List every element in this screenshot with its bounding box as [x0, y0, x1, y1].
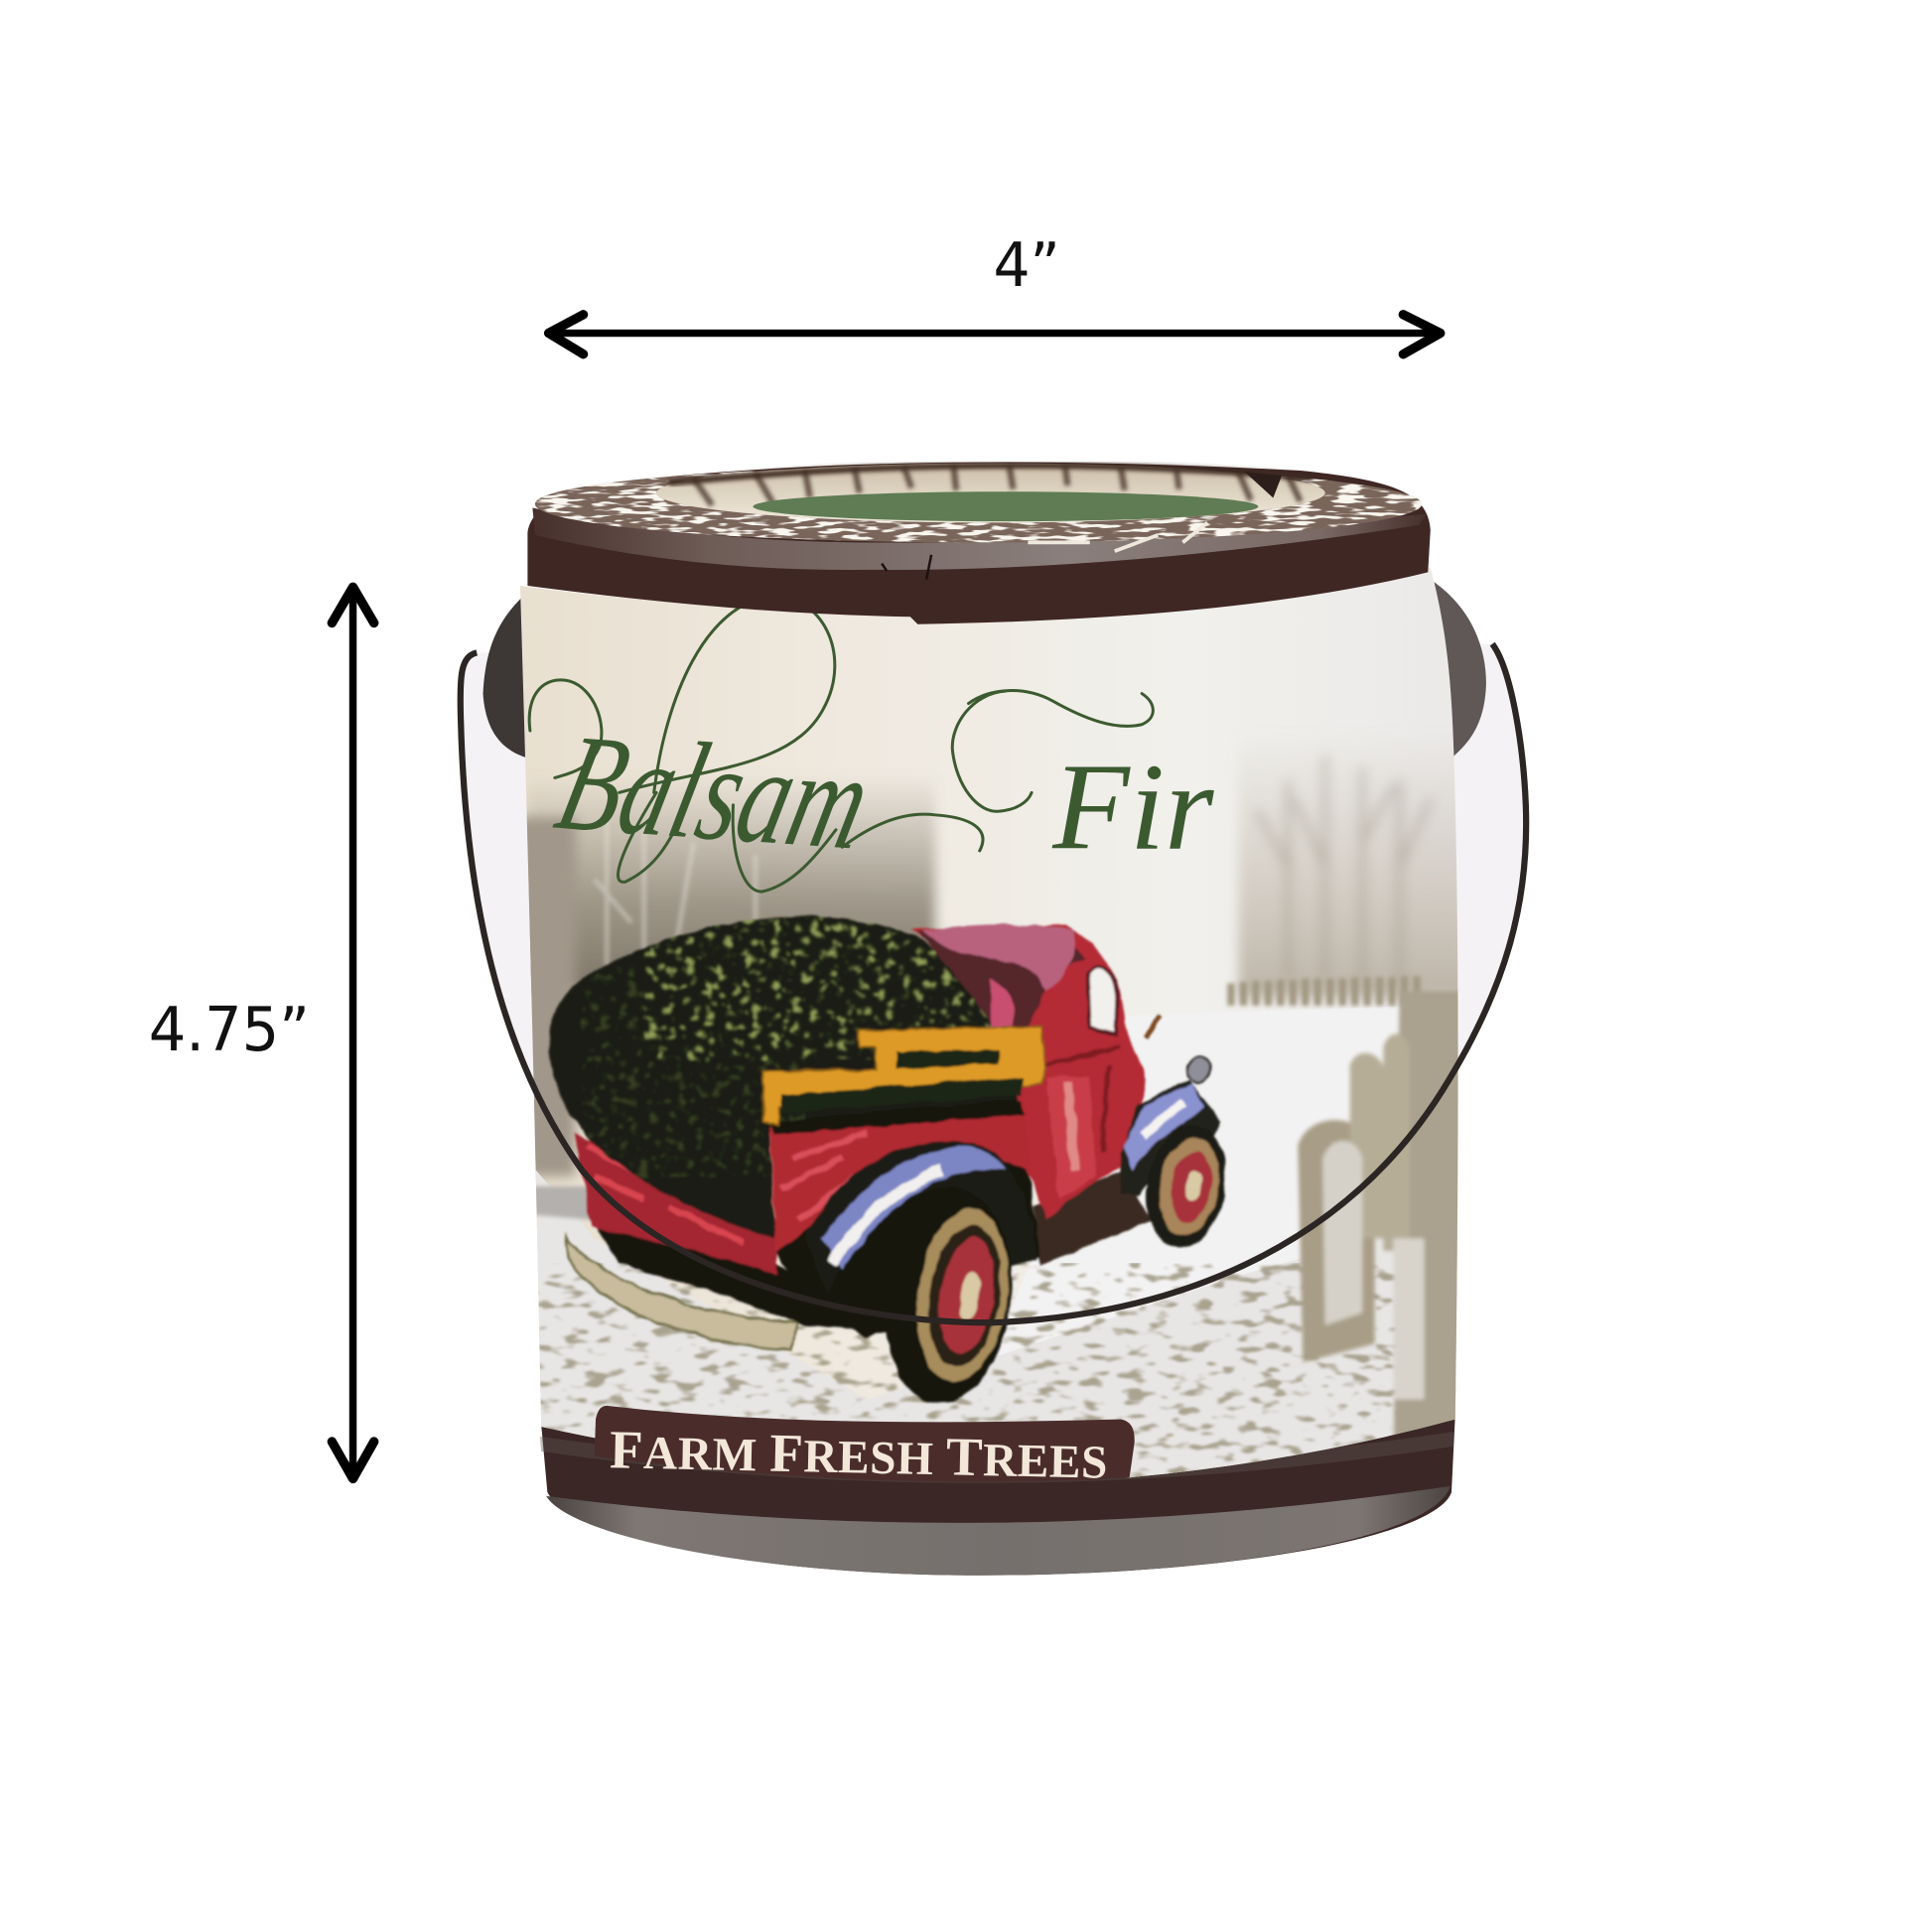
- galvanized base: [540, 1432, 1453, 1576]
- label: [507, 557, 1473, 1498]
- label base: [507, 557, 1473, 1498]
- truck cab: [910, 925, 1146, 1220]
- rim chips: [1028, 522, 1207, 551]
- cab door highlights: [1046, 1077, 1096, 1199]
- product name: Balsam Fir: [529, 597, 1214, 892]
- illustration: truck with tree: [532, 904, 1235, 1412]
- candle tin: [461, 463, 1526, 1576]
- arrow: width: [549, 315, 1441, 354]
- ground: [536, 1170, 1457, 1477]
- truck rear bed: [575, 1133, 777, 1276]
- wax surface: [753, 491, 1258, 521]
- headlamp: [1186, 1057, 1211, 1082]
- arrow: height: [332, 587, 374, 1478]
- distant fence: [1231, 976, 1417, 1006]
- rim cracks: [882, 555, 931, 580]
- fence posts: [1295, 989, 1458, 1436]
- foggy trees left: [514, 774, 935, 1176]
- rim: [527, 463, 1431, 624]
- icon: left handle ear: [483, 592, 527, 758]
- label banner: Farm Fresh Trees: FARM FRESH TREES: [609, 1419, 1108, 1490]
- tree load: [547, 913, 1020, 1239]
- tin base band: [541, 1416, 1455, 1576]
- side panel: [770, 1105, 1031, 1253]
- icon: right handle ear: [1435, 582, 1486, 758]
- product name: Balsam Fir: Fir: [1051, 738, 1214, 875]
- rail slits: [781, 1050, 1023, 1113]
- yellow rails: [762, 1027, 1045, 1125]
- front wheel: [1144, 1135, 1227, 1249]
- handle: [461, 644, 1526, 1322]
- dark bar: [770, 1100, 1026, 1135]
- handle backing haze: [461, 644, 1526, 1171]
- snowy road: [997, 1007, 1398, 1356]
- rim front band: [532, 507, 1427, 570]
- front fender: [805, 1141, 1037, 1295]
- mirror: [1146, 1016, 1162, 1037]
- width dimension label: 4”: [993, 230, 1060, 301]
- rim opening: [656, 464, 1325, 522]
- undercarriage: [596, 1227, 888, 1334]
- windshield: [1087, 967, 1117, 1035]
- rim dark chip: [1245, 472, 1282, 497]
- undercab chassis: [1035, 1171, 1152, 1266]
- rim collar: [527, 463, 1431, 624]
- infographic canvas: [151, 241, 1529, 1576]
- product name: Balsam Fir: Balsam: [544, 707, 884, 879]
- truck bumper: [566, 1237, 797, 1350]
- wheel well: [775, 1140, 1040, 1337]
- rear tire: [884, 1195, 1015, 1404]
- front fender blue: [1121, 1080, 1220, 1195]
- foggy trees right: [1238, 731, 1467, 997]
- height dimension label: 4.75”: [149, 995, 310, 1065]
- rim drips: [694, 466, 1301, 505]
- rim top surface: [535, 466, 1422, 542]
